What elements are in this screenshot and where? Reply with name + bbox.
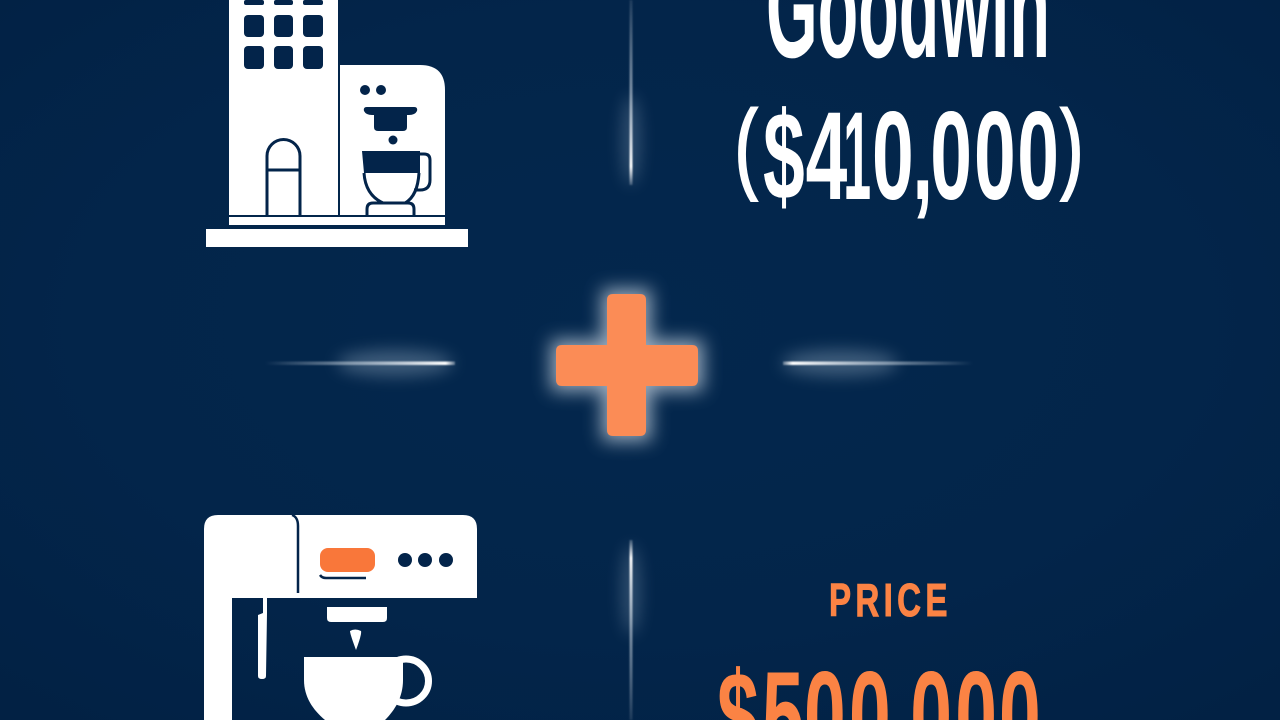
divider: bottom vertical glow [622, 540, 640, 720]
icon: espresso machine [204, 515, 477, 720]
icon: office building with coffee machine [206, 0, 468, 247]
label: price: PRICE [829, 576, 952, 626]
door [267, 140, 300, 215]
orange button [320, 548, 375, 572]
value: goodwill amount: ( [735, 90, 757, 201]
divider: left horizontal glow [265, 350, 455, 376]
value: goodwill amount: 0,000 [872, 86, 1059, 226]
value: goodwill amount: ) [1061, 90, 1083, 201]
cup [364, 154, 430, 215]
icon: plus sign [556, 294, 698, 436]
value: goodwill amount: $4 [763, 86, 847, 226]
divider: right horizontal glow [782, 350, 973, 376]
value: goodwill amount [735, 86, 1083, 227]
divider: top vertical glow [622, 0, 640, 185]
value: goodwill amount: 1 [843, 87, 871, 227]
